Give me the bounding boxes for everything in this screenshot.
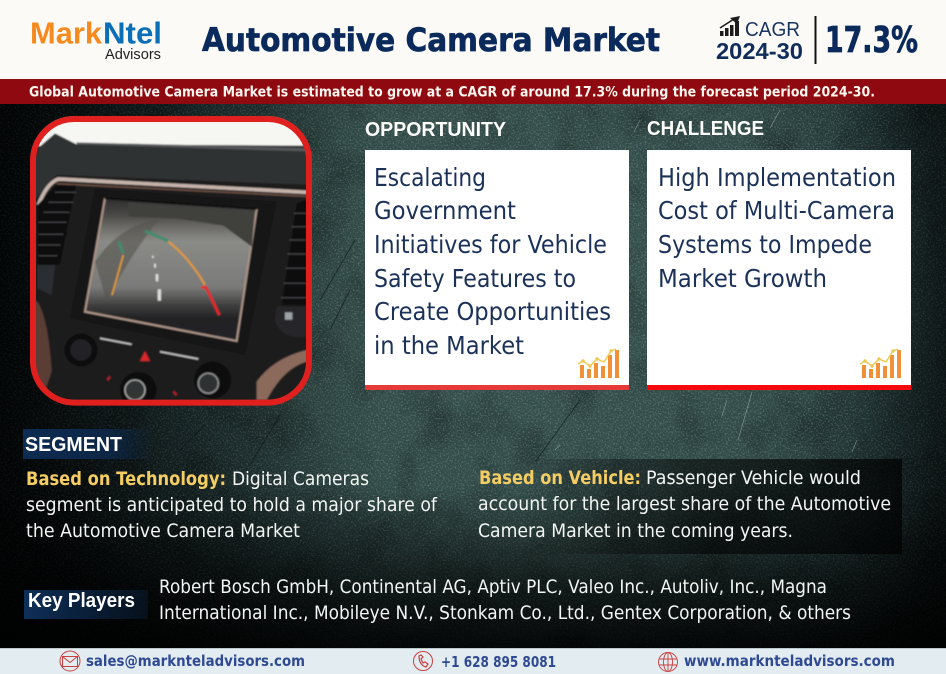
heading: segment: SEGMENT [25, 434, 122, 456]
divider [814, 16, 816, 64]
opportunity text: Government [374, 196, 516, 225]
text block: based on vehicle [478, 459, 902, 554]
key players list: International Inc., Mobileye N.V., Stonkam Co., Ltd., Gentex Corporation, & others [159, 602, 851, 624]
photo: dashboard reverse camera screen [30, 116, 313, 408]
opportunity text: Create Opportunities [374, 297, 611, 326]
opportunity text: in the Market [374, 331, 524, 360]
panel: challenge card [647, 150, 911, 390]
challenge text: Market Growth [658, 264, 827, 293]
key players list: Robert Bosch GmbH, Continental AG, Aptiv PLC, Valeo Inc., Autoliv, Inc., Magna [159, 576, 827, 598]
logo: MarkNtel Advisors [30, 16, 162, 63]
CAGR label: CAGR [745, 19, 800, 41]
opportunity text: Initiatives for Vehicle [374, 230, 607, 259]
panel: opportunity card [365, 150, 629, 390]
opportunity text: Safety Features to [374, 264, 576, 293]
text block: based on vehicle: Based on Vehicle: [479, 467, 641, 489]
red summary banner [0, 79, 946, 104]
key players list [159, 576, 851, 624]
challenge text: High Implementation [658, 163, 896, 192]
icon: email [60, 651, 80, 671]
phone number: +1 628 895 8081 [441, 653, 556, 671]
heading: opportunity: OPPORTUNITY [365, 119, 507, 141]
website: www.marknteladvisors.com [684, 652, 895, 670]
icon: growth chart [860, 349, 901, 378]
text block: based on vehicle: account for the largest share of the Automotive [478, 493, 891, 515]
key players label [24, 590, 148, 619]
heading: challenge: CHALLENGE [647, 118, 764, 140]
text block: based on technology [26, 468, 438, 542]
challenge text: Systems to Impede [658, 230, 872, 259]
icon: globe [658, 652, 678, 672]
logo: MarkNtel Advisors: Mark [30, 16, 103, 50]
challenge text [658, 163, 896, 293]
challenge text: Cost of Multi-Camera [658, 196, 895, 225]
email address: sales@marknteladvisors.com [86, 652, 305, 670]
text block: based on technology: Digital Cameras [232, 468, 369, 490]
CAGR period: 2024-30 [716, 38, 803, 64]
text block: based on vehicle: Passenger Vehicle would [646, 467, 861, 489]
text block: based on vehicle: Camera Market in the coming years. [478, 520, 793, 542]
header band [0, 0, 946, 79]
heading: segment [23, 429, 153, 459]
logo: MarkNtel Advisors: Ntel [103, 16, 162, 50]
opportunity text [374, 163, 611, 360]
opportunity text: Escalating [374, 163, 486, 192]
icon: growth chart [578, 349, 619, 378]
icon: CAGR growth bars [720, 16, 740, 36]
logo: MarkNtel Advisors: Advisors [105, 46, 161, 63]
icon: phone [414, 652, 432, 670]
text block: based on technology: Based on Technology: [26, 468, 226, 490]
text block: based on technology: the Automotive Camera Market [26, 520, 300, 542]
text block: based on technology: segment is anticipated to hold a major share of [26, 494, 438, 516]
key players label: Key Players [28, 590, 135, 612]
title: Automotive Camera Market [202, 21, 660, 59]
footer contact bar [0, 648, 946, 674]
